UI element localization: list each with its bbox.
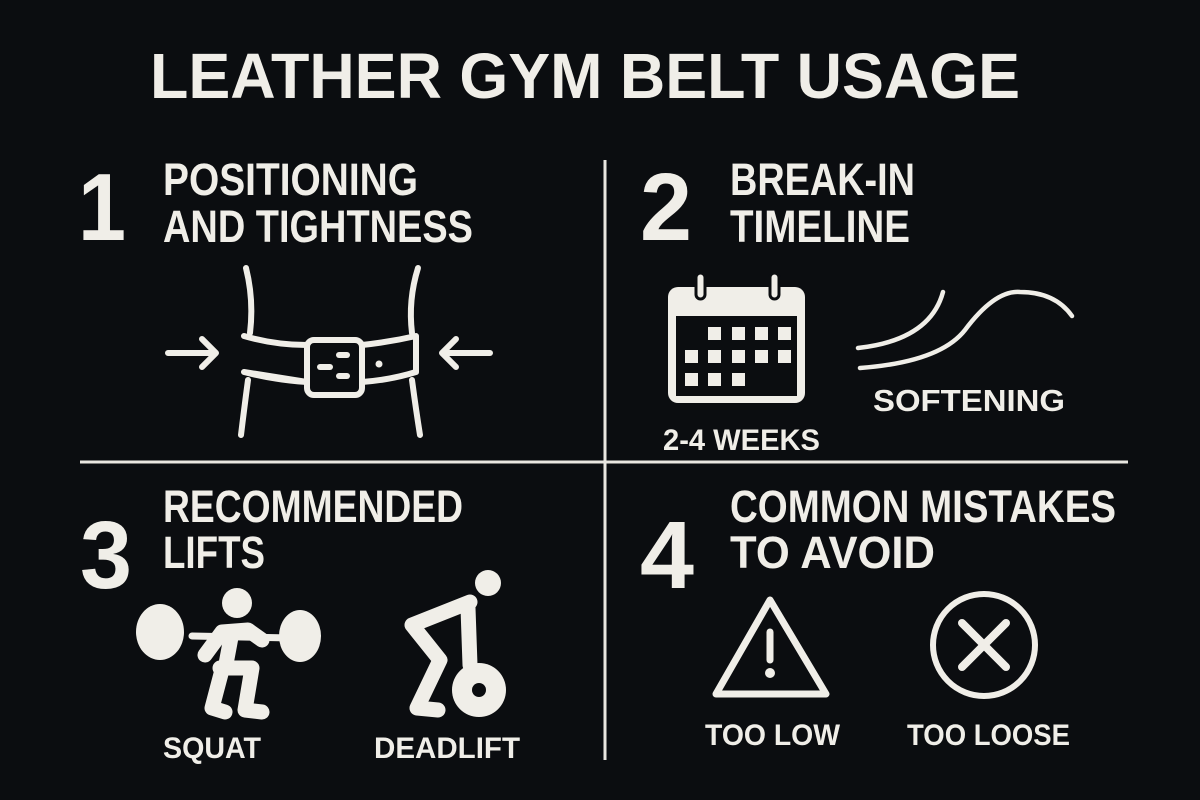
- icon: circle x: [933, 594, 1035, 696]
- panel: recommended lifts: LIFTS: [163, 527, 265, 578]
- label: too low: TOO LOW: [705, 719, 841, 752]
- heading: common mistakes to avoid: COMMON MISTAKES: [730, 481, 1116, 532]
- label: deadlift: DEADLIFT: [374, 732, 520, 765]
- number 1: 1: [78, 154, 126, 261]
- panel: common mistakes to avoid: [640, 481, 1116, 752]
- icon: calendar: [668, 273, 805, 403]
- panel: break-in timeline: TIMELINE: [730, 201, 910, 252]
- panel: common mistakes to avoid: TO AVOID: [730, 527, 935, 578]
- icon: warning triangle: [716, 600, 826, 694]
- number 3: 3: [80, 502, 132, 609]
- label: squat: SQUAT: [163, 732, 261, 765]
- number 2: 2: [640, 154, 692, 261]
- label: 2-4 weeks: 2-4 WEEKS: [663, 424, 820, 457]
- icon: belt around waist: [168, 268, 490, 435]
- panel: positioning and tightness: [78, 154, 490, 435]
- panel: break-in timeline: [640, 154, 1072, 457]
- panel: positioning and tightness: AND TIGHTNESS: [163, 201, 473, 252]
- icon: deadlift: [412, 570, 506, 717]
- label: softening: SOFTENING: [873, 383, 1065, 418]
- label: too loose: TOO LOOSE: [907, 719, 1070, 752]
- icon: squat: [136, 588, 321, 712]
- heading: break-in timeline: BREAK-IN: [730, 154, 915, 205]
- heading: positioning and tightness: POSITIONING: [163, 154, 418, 205]
- panel: recommended lifts: [80, 481, 520, 765]
- number 4: 4: [640, 502, 694, 609]
- heading: recommended lifts: RECOMMENDED: [163, 481, 463, 532]
- icon: softening curves: [858, 292, 1072, 368]
- title: LEATHER GYM BELT USAGE: [150, 40, 1020, 112]
